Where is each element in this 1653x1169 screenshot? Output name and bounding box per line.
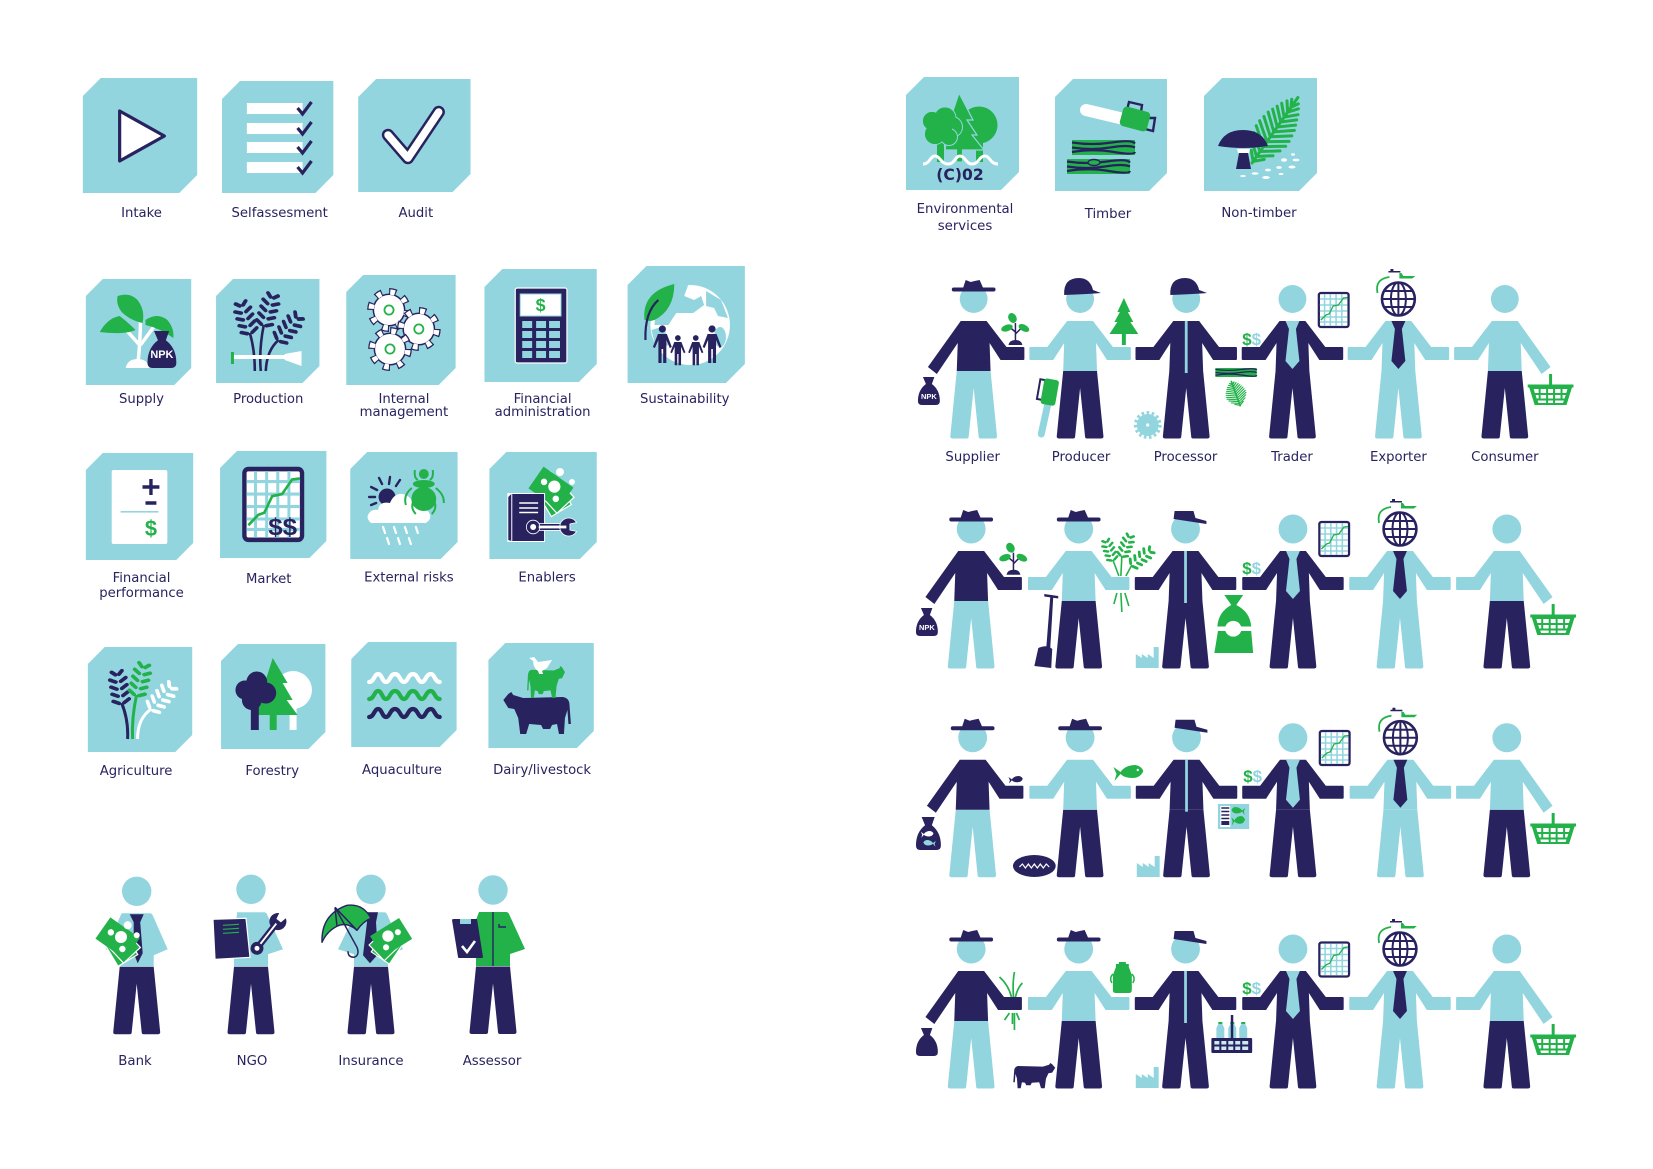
icon: mushroom and frond [1218, 87, 1313, 179]
label: Forestry [245, 764, 299, 779]
panel: Aquaculture [351, 642, 457, 778]
label: Market [246, 572, 291, 587]
row: agriculture value chain [916, 499, 1576, 668]
panel: Financial administration [484, 269, 597, 420]
person: Consumer [1456, 934, 1553, 1088]
label: Assessor [463, 1054, 522, 1069]
icon: dollars: $$ [1242, 330, 1262, 349]
icon: basket [1528, 374, 1573, 405]
row: forestry value chain [918, 269, 1573, 465]
icon: saw blade [1136, 414, 1159, 436]
label: Audit [399, 206, 433, 221]
person: Consumer [1456, 723, 1553, 877]
icon: chart [1319, 942, 1349, 976]
icon: balance sheet [112, 470, 167, 544]
label line two: performance [99, 586, 184, 601]
label: NGO [237, 1054, 267, 1069]
icon: clipboard [452, 919, 483, 958]
icon: planks [1215, 368, 1257, 377]
person: Producer [1028, 510, 1129, 668]
icon: crops [109, 662, 179, 739]
icon: fish bag [916, 817, 941, 850]
icon: chainsaw [1037, 378, 1059, 434]
icon: NPK bag [918, 377, 940, 405]
icon: NPK bag: NPK [919, 623, 935, 632]
label: Aquaculture [362, 763, 442, 778]
icon: globe leaf family [644, 284, 730, 365]
label line two: management [360, 405, 448, 420]
label: Selfassesment [232, 206, 328, 221]
icon: money [90, 917, 146, 972]
row: dairy value chain [916, 919, 1576, 1088]
icon: frond [1222, 378, 1249, 409]
icon: dollars: $$ [1242, 979, 1262, 998]
icon: market chart: $$ [268, 514, 297, 541]
person: Supplier [925, 930, 1022, 1088]
label: Processor [1154, 450, 1218, 465]
panel: Forestry [221, 644, 325, 779]
icon: dollars: $$ [1243, 767, 1263, 786]
panel: Intake [83, 78, 197, 221]
icon: cow [1013, 1063, 1055, 1088]
label: Bank [118, 1054, 152, 1069]
person: Supplier [928, 280, 1024, 438]
icon: pine tree [1109, 298, 1138, 345]
icon: plant and NPK bag: NPK [150, 349, 173, 361]
icon: small fish [1008, 776, 1023, 784]
panel: Selfassesment [222, 81, 333, 221]
person: Consumer [1456, 514, 1553, 668]
icon: calculator: $ [536, 295, 546, 315]
label: Agriculture [100, 764, 172, 779]
icon: seedling [1000, 311, 1031, 345]
icon: pond [1013, 855, 1056, 877]
person: NGO [213, 875, 289, 1034]
panel: Agriculture [88, 647, 192, 779]
label: Internal [378, 392, 429, 407]
label: Financial [514, 392, 572, 407]
icon: calculator [515, 288, 567, 363]
icon: seedling [998, 541, 1029, 575]
label: Supply [119, 392, 164, 407]
icon: milk basket [1211, 1015, 1252, 1053]
person: Exporter [1349, 499, 1451, 668]
label line two: services [938, 219, 992, 234]
panel: Internal management [346, 275, 456, 420]
icon: balance sheet: $ [145, 516, 157, 541]
icon: waves [369, 674, 440, 717]
label: Producer [1052, 450, 1111, 465]
icon: basket [1530, 1024, 1576, 1055]
person: Assessor [452, 875, 525, 1034]
person: Exporter [1350, 708, 1451, 877]
panel: Production [216, 279, 319, 407]
person: Processor [1135, 511, 1236, 668]
icon: chart [1320, 731, 1350, 765]
person: Processor [1135, 931, 1236, 1088]
label: Supplier [945, 450, 1000, 465]
person: Processor [1136, 720, 1237, 877]
person: Supplier [927, 719, 1023, 877]
icon: basket [1530, 813, 1576, 844]
icon: wrench [246, 910, 289, 959]
person: Trader [1242, 285, 1343, 438]
person: Exporter [1348, 269, 1449, 438]
person: Producer [1028, 930, 1129, 1088]
icon: green fish [1114, 765, 1143, 781]
panel: Non-timber [1204, 78, 1317, 221]
icon: grass [1000, 972, 1022, 1030]
icon: fish package [1218, 804, 1249, 829]
panel: Timber [1055, 79, 1167, 222]
icon: factory [1136, 647, 1159, 668]
label: Non-timber [1221, 206, 1297, 221]
person: Producer [1029, 719, 1131, 877]
icon: milk can [1111, 962, 1134, 993]
person: Bank [90, 877, 168, 1034]
label: Sustainability [640, 392, 730, 407]
icon: document [213, 918, 250, 959]
icon: money, book and wrench [507, 467, 580, 542]
person: Processor [1135, 278, 1237, 438]
icon: forest, water, carbon: (C)02 [936, 166, 984, 184]
icon: checklist [247, 102, 311, 173]
panel: Audit [358, 79, 471, 221]
person: Insurance [322, 875, 417, 1034]
icon: shovel [1034, 594, 1058, 668]
icon: wheat [1101, 533, 1155, 612]
person: Trader [1242, 934, 1344, 1088]
icon: basket [1530, 604, 1576, 635]
icon: check mark [388, 112, 439, 158]
icon: NPK bag: NPK [921, 392, 937, 401]
panel: Sustainability [628, 266, 745, 407]
label: External risks [364, 570, 454, 586]
icon: money [364, 918, 417, 969]
panel: Financial performance [86, 453, 193, 601]
label: Exporter [1370, 450, 1427, 465]
icon: feed bag [916, 1028, 938, 1056]
label: Financial [113, 571, 170, 586]
label: Trader [1270, 450, 1313, 465]
icon: gears [371, 292, 437, 367]
label: Environmental [917, 202, 1013, 217]
panel: External risks [350, 452, 458, 586]
label: Production [233, 392, 303, 407]
panel: Environmental services [906, 77, 1019, 234]
row: aquaculture value chain [916, 708, 1576, 877]
label: Dairy/livestock [493, 763, 591, 778]
label: Enablers [518, 570, 576, 586]
icon: chart [1319, 293, 1349, 327]
label line two: administration [495, 405, 591, 420]
label: Insurance [338, 1054, 404, 1069]
icon: chart [1319, 522, 1349, 556]
person: Trader [1242, 514, 1344, 668]
icon: NPK bag [916, 608, 938, 636]
icon: forest, water, carbon [922, 93, 998, 184]
value chain rows [916, 269, 1576, 1088]
icon: green sack [1214, 595, 1253, 653]
panel: Market [220, 451, 326, 587]
icon: wheat and hoe [231, 292, 305, 371]
icon: play [120, 111, 164, 161]
panel: Dairy/livestock [488, 643, 594, 778]
icon: chainsaw and planks [1067, 102, 1155, 174]
panel: Supply [86, 279, 191, 407]
icon: weather and pest [368, 469, 444, 544]
person: Trader [1242, 723, 1344, 877]
icon: factory [1136, 1067, 1159, 1088]
panel: Enablers [489, 452, 597, 586]
icon: umbrella [322, 905, 371, 957]
person: Exporter [1349, 919, 1451, 1088]
icon: trees [235, 658, 312, 730]
person: Consumer [1454, 285, 1551, 438]
label: Intake [121, 206, 162, 221]
left icon panels [83, 78, 745, 779]
icon: dollars: $$ [1242, 559, 1262, 578]
label: Timber [1084, 207, 1132, 222]
icon: cow, calf and chicken [503, 657, 571, 734]
label: Consumer [1471, 450, 1539, 465]
person: Supplier [925, 510, 1022, 668]
person: Producer [1029, 278, 1131, 438]
icon: factory [1137, 856, 1160, 877]
